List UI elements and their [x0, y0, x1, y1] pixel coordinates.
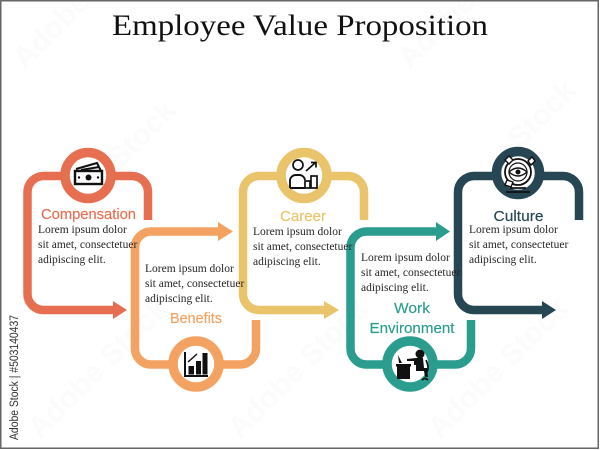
- text: career: Lorem ipsum dolor: [253, 226, 342, 238]
- text: benefits: adipiscing elit.: [145, 293, 213, 305]
- icon: bar chart: [173, 341, 219, 387]
- text: Adobe Stock: [22, 292, 175, 445]
- text: career: adipiscing elit.: [253, 256, 321, 268]
- text: culture: adipiscing elit.: [469, 254, 537, 266]
- text: work environment: sit amet, consectetuer: [361, 267, 460, 279]
- text: compensation: sit amet, consectetuer: [38, 239, 137, 251]
- text: Stock: [502, 74, 583, 155]
- icon: eye emblem: [496, 152, 540, 194]
- heading: benefits: Benefits: [170, 310, 222, 327]
- heading: career: Career: [280, 208, 326, 225]
- heading: compensation: Compensation: [41, 206, 136, 223]
- heading: culture: Culture: [494, 208, 544, 225]
- title: Employee Value Proposition: [112, 9, 488, 42]
- arrow: compensation path: [28, 176, 148, 319]
- text: benefits: sit amet, consectetuer: [145, 278, 244, 290]
- panel: benefits: [135, 222, 256, 387]
- text: career: sit amet, consectetuer: [253, 241, 352, 253]
- panel: work environment: [350, 222, 471, 387]
- text: Adobe Stock: [422, 292, 575, 445]
- heading: work environment: Environment: [370, 320, 455, 337]
- icon: person at desk: [387, 341, 433, 387]
- text: culture: sit amet, consectetuer: [469, 239, 568, 251]
- panel: compensation: [28, 152, 148, 319]
- text: Adobe Stock: [222, 292, 375, 445]
- arrow: benefits path: [135, 222, 256, 364]
- arrow: career path: [243, 176, 364, 319]
- stock id text: Adobe Stock | #503140437: [9, 315, 21, 440]
- text: work environment: adipiscing elit.: [361, 282, 429, 294]
- text: compensation: Lorem ipsum dolor: [38, 224, 127, 236]
- heading: work environment: Work: [394, 300, 431, 317]
- text: culture: Lorem ipsum dolor: [469, 224, 558, 236]
- arrow: culture path: [458, 176, 579, 319]
- arrow: work environment path: [350, 222, 471, 364]
- text: benefits: Lorem ipsum dolor: [145, 263, 234, 275]
- text: work environment: Lorem ipsum dolor: [361, 252, 450, 264]
- panel: culture: [458, 152, 579, 319]
- text: Stock: [102, 94, 183, 175]
- icon: career growth: [281, 152, 327, 198]
- panel: career: [243, 152, 364, 319]
- icon: banknotes: [65, 152, 111, 198]
- text: compensation: adipiscing elit.: [38, 254, 106, 266]
